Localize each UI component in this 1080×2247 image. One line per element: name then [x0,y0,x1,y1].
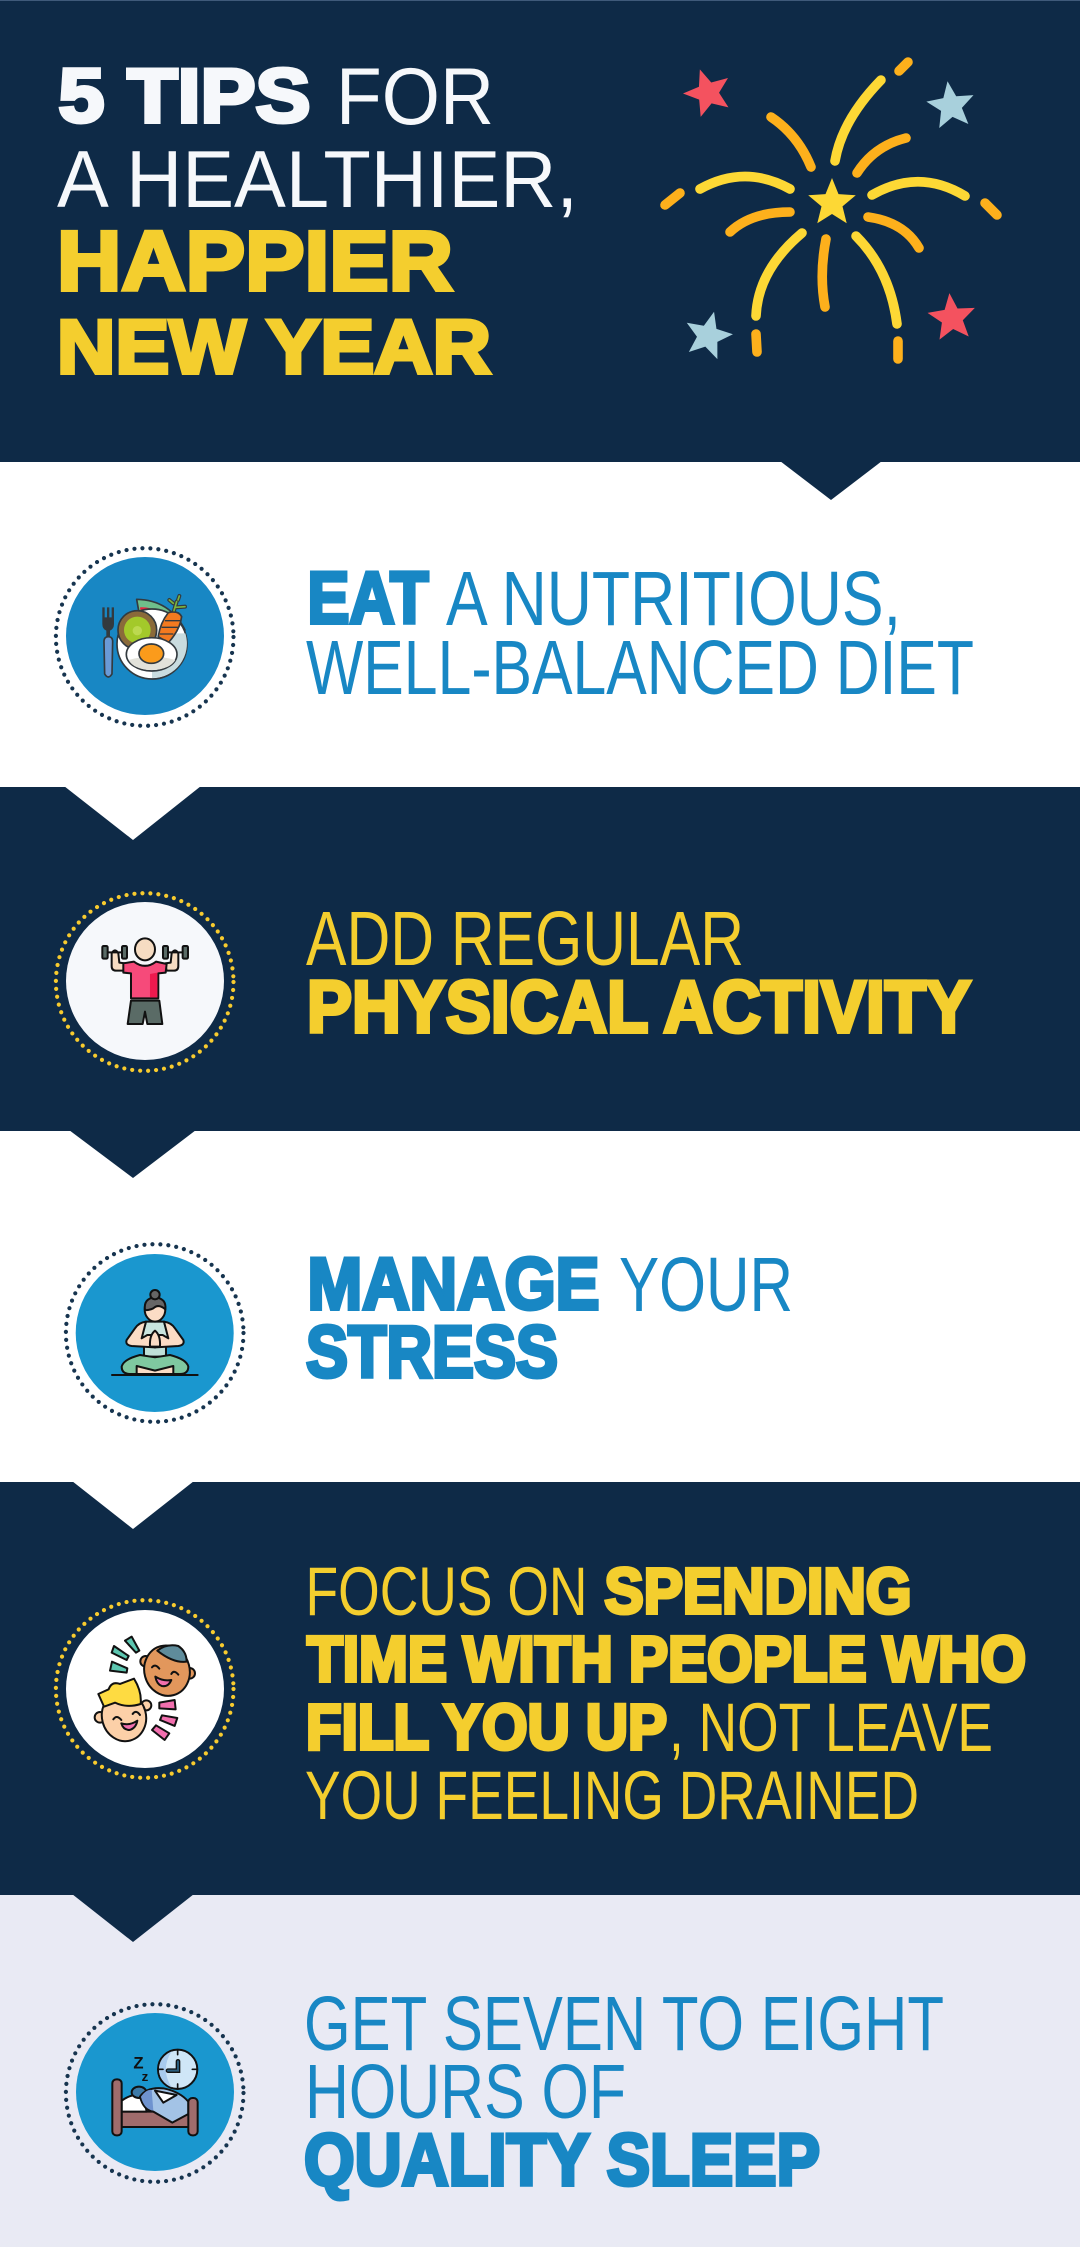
text: add regular physical activity [306,896,971,1048]
icon: fireworks [665,62,997,361]
text: manage your stress: YOUR [619,1242,793,1328]
text: focus on spending time: TIME WITH PEOPLE WHO [307,1623,1026,1695]
title: HAPPIER [57,214,453,308]
text: eat a nutritious diet: EAT [308,558,428,639]
text: focus on spending time: FILL YOU UP [306,1691,667,1763]
text: seven to eight hours of quality sleep: HOURS OF [305,2049,626,2135]
panel: tip 5 quality sleep [0,1894,1080,2247]
icon: sleep badge: z [142,2069,149,2084]
icon: meditation badge [66,1244,244,1422]
panel: tip 1 eat [0,461,1080,787]
panel: tip 3 manage stress [0,1130,1080,1482]
arrow: header pointer [780,461,882,500]
text: seven to eight hours of quality sleep: QUALITY SLEEP [304,2120,820,2201]
icon: sleep badge: Z [133,2054,144,2073]
text: manage your stress: STRESS [306,1312,558,1393]
text: focus on spending time: , NOT LEAVE [669,1689,993,1766]
icon: happy friends badge [56,1600,234,1778]
icon: sleep badge [66,2004,244,2182]
arrow: navy pointer [72,1894,194,1942]
arrow: navy pointer [69,1130,196,1178]
panel: header [0,0,1080,462]
text: seven to eight hours of quality sleep [304,1981,944,2201]
text: manage your stress [306,1242,793,1393]
title: FOR [336,52,494,142]
text: manage your stress: MANAGE [308,1244,600,1325]
icon: exercise badge [56,893,234,1071]
arrow: white pointer [72,1481,194,1529]
text: add regular physical activity: ADD REGULAR [306,896,744,982]
panel: tip 2 physical activity [0,786,1080,1131]
icon: food plate badge [56,548,234,726]
text: add regular physical activity: PHYSICAL ACTIVITY [307,967,971,1048]
title: NEW YEAR [57,305,491,390]
title: A HEALTHIER, [57,135,578,225]
title [57,52,578,390]
title: 5 TIPS [58,54,310,139]
text: focus on spending time: FOCUS ON [306,1553,588,1630]
text: eat a nutritious diet [306,556,974,711]
arrow: white pointer [64,786,201,840]
text: focus on spending time: SPENDING [604,1555,912,1627]
text: eat a nutritious diet: A NUTRITIOUS, [446,556,901,642]
text: focus on spending time [305,1553,1026,1834]
text: focus on spending time: YOU FEELING DRAINED [305,1757,919,1834]
panel: tip 4 spending time [0,1481,1080,1895]
